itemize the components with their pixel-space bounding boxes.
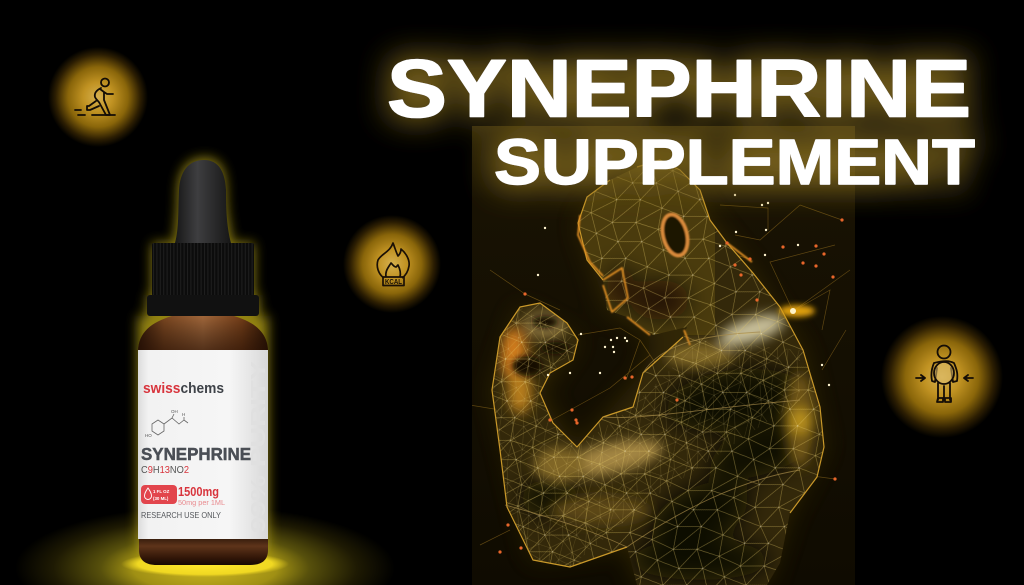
title line: supplement: SUPPLEMENT: [494, 126, 975, 198]
molecule diagram: HO: [145, 433, 152, 438]
bottle base: [139, 536, 268, 565]
bottle shoulder: [138, 316, 268, 352]
silhouette fill: [492, 166, 824, 585]
product name on label: SYNEPHRINE: [141, 444, 251, 464]
shadow patches: [520, 265, 822, 580]
ribbed cap: [152, 243, 254, 296]
volume badge: (30 ML): [153, 496, 169, 501]
chemical formula: C9H13NO2: [141, 464, 189, 476]
constellation lines: [470, 205, 850, 545]
highlight patches: [501, 308, 815, 524]
white particles: [538, 195, 829, 385]
icon: calorie flame: KCAL: [385, 279, 403, 286]
orange energy flare: [779, 305, 815, 317]
dark fist folds: [512, 316, 569, 376]
triangular mesh: [493, 168, 822, 585]
dosage per ml: 50mg per 1ML: [178, 498, 225, 507]
molecule diagram: H: [182, 412, 185, 417]
illustration: muscular polygon figure: [470, 150, 850, 585]
dense arm mesh: [492, 307, 800, 567]
volume badge: [141, 485, 177, 504]
ear: [658, 212, 692, 258]
volume badge: 1 FL OZ: [153, 489, 170, 494]
figure ambient glow: [492, 167, 824, 585]
silhouette outline: [492, 160, 824, 567]
cap ring: [147, 295, 259, 316]
title: [387, 44, 975, 198]
disclaimer: RESEARCH USE ONLY: [141, 511, 222, 520]
illustration: dropper bottle: [138, 160, 270, 565]
orange particles: [500, 220, 842, 552]
icon: slimming body: [881, 316, 1003, 438]
dropper bulb: [175, 160, 231, 243]
molecule diagram: OH: [171, 409, 178, 414]
brand name: swisschems: [143, 381, 224, 397]
panel: figure backdrop: [472, 126, 855, 585]
title line: synephrine: SYNEPHRINE: [387, 44, 971, 134]
white label: [138, 350, 268, 539]
panel: bottle glow: [0, 158, 410, 585]
icon: calorie flame: [343, 215, 441, 313]
icon: runner: [48, 47, 148, 147]
label watermark: 99% PURITY: [248, 360, 270, 533]
dosage: 1500mg: [178, 485, 219, 499]
face and neck accents: [578, 215, 752, 345]
molecule diagram: [145, 409, 188, 438]
arm to torso contour: [505, 332, 800, 547]
